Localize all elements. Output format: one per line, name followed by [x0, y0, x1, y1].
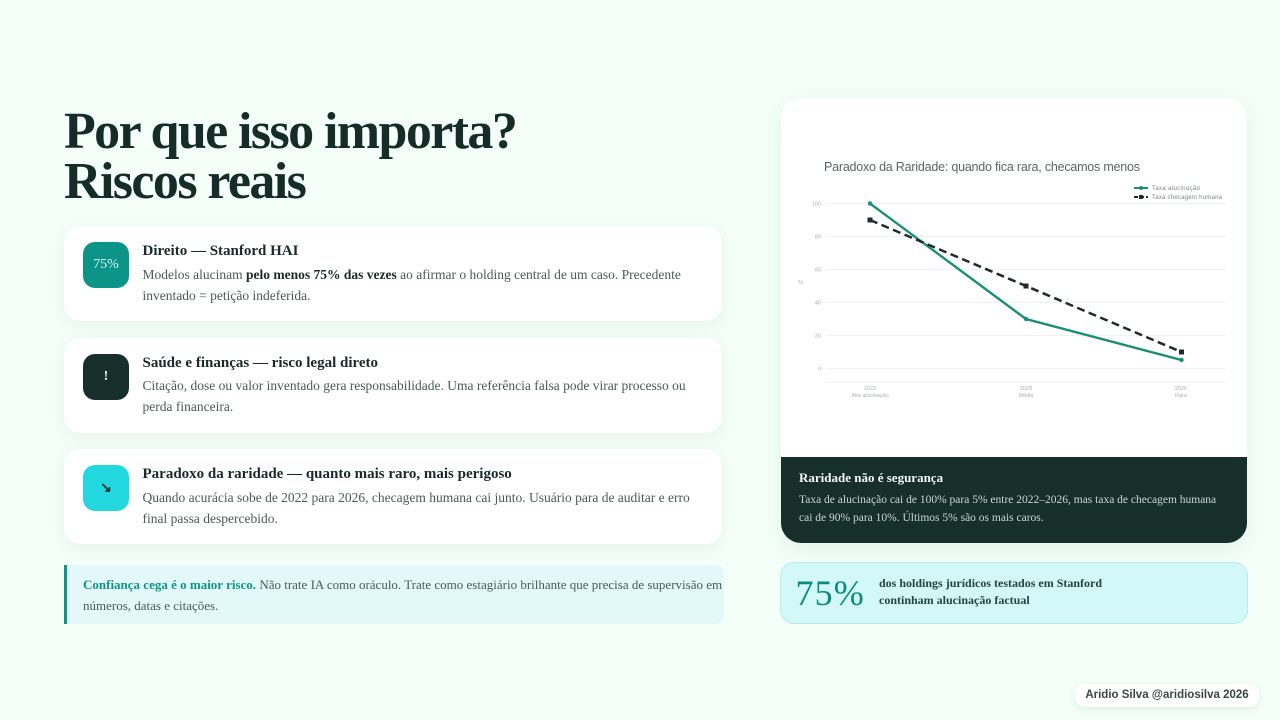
y axis labels [798, 202, 821, 372]
insight text [799, 494, 1216, 524]
card: Saúde e finanças [64, 338, 722, 433]
legend: Taxa alucinação [1152, 186, 1201, 192]
panel: chart and insight [781, 98, 1247, 543]
x axis labels: Média [1019, 393, 1034, 399]
card text: Paradoxo da raridade [142, 490, 690, 526]
card text: Direito [142, 267, 681, 303]
title [64, 103, 516, 210]
legend [1134, 186, 1223, 201]
card text: Direito: inventado = petição indeferida. [142, 288, 311, 303]
title: Riscos reais [64, 153, 305, 210]
stat callout: 75% [780, 562, 1248, 624]
insight text: Taxa de alucinação cai de 100% para 5% entre 2022–2026, mas taxa de checagem humana [799, 494, 1216, 506]
callout: confiança cega [64, 565, 724, 624]
insight text: cai de 90% para 10%. Últimos 5% são os mais caros. [799, 512, 1044, 524]
card text: Saúde e finanças: perda financeira. [142, 399, 233, 414]
chart title: Paradoxo da Raridade: quando fica rara, checamos menos [824, 160, 1140, 174]
stat text: continham alucinação factual [879, 593, 1030, 607]
y axis labels: % [798, 280, 803, 286]
card heading: Paradoxo da raridade: Paradoxo da raridade — quanto mais raro, mais perigoso [142, 466, 512, 482]
insight panel [781, 457, 1247, 543]
stat text: dos holdings jurídicos testados em Stanford [879, 576, 1102, 590]
legend: Taxa checagem humana [1152, 195, 1223, 201]
icon: exclamation: ! [104, 369, 108, 384]
x axis labels: 2026 [1175, 386, 1187, 392]
card: Direito [64, 226, 722, 321]
card: Paradoxo da raridade [64, 449, 722, 544]
title: Por que isso importa? [64, 103, 516, 160]
y axis labels: 40 [815, 300, 821, 306]
stat number: 75% [796, 573, 865, 613]
x axis labels: 2023 [1020, 386, 1032, 392]
icon: 75% [83, 242, 129, 288]
stat text [879, 576, 1102, 607]
card text: Saúde e finanças [142, 378, 686, 414]
card text: Paradoxo da raridade: Quando acurácia sobe de 2022 para 2026, checagem humana cai junto. Usuário para de auditar e erro [142, 490, 690, 505]
card text: Paradoxo da raridade: final passa despercebido. [142, 511, 278, 526]
icon: down-right arrow: ↘ [100, 480, 112, 496]
y axis labels: 20 [815, 334, 821, 340]
insight heading: Raridade não é segurança [799, 470, 943, 485]
y axis labels: 80 [815, 234, 821, 240]
series: taxa de checagem humana [868, 218, 1184, 354]
y axis labels: 0 [818, 366, 821, 372]
x axis labels [851, 386, 1188, 399]
x axis labels: Alta alucinação [851, 393, 889, 399]
series: taxa de alucinação [868, 201, 1184, 362]
x axis labels: 2022 [864, 386, 876, 392]
callout text: números, datas e citações. [83, 598, 218, 613]
icon: 75%: 75% [93, 257, 119, 272]
icon: down-right arrow [83, 465, 129, 511]
credit badge [1075, 684, 1259, 707]
callout text: Confiança cega é o maior risco. Não trate IA como oráculo. Trate como estagiário brilhante que precisa de supervisão em [83, 577, 722, 592]
y axis labels: 100 [812, 202, 821, 208]
credit badge: Aridio Silva @aridiosilva 2026 [1085, 689, 1249, 701]
card heading: Saúde e finanças: Saúde e finanças — risco legal direto [142, 355, 378, 371]
icon: exclamation [83, 354, 129, 400]
card text: Saúde e finanças: Citação, dose ou valor inventado gera responsabilidade. Uma referência falsa pode virar processo ou [142, 378, 686, 393]
x axis labels: Rara [1175, 393, 1188, 399]
callout text [83, 577, 722, 613]
card heading: Direito: Direito — Stanford HAI [142, 243, 298, 259]
card text: Direito: Modelos alucinam pelo menos 75% das vezes ao afirmar o holding central de um caso. Precedente [142, 267, 681, 282]
y axis labels: 60 [815, 268, 821, 274]
